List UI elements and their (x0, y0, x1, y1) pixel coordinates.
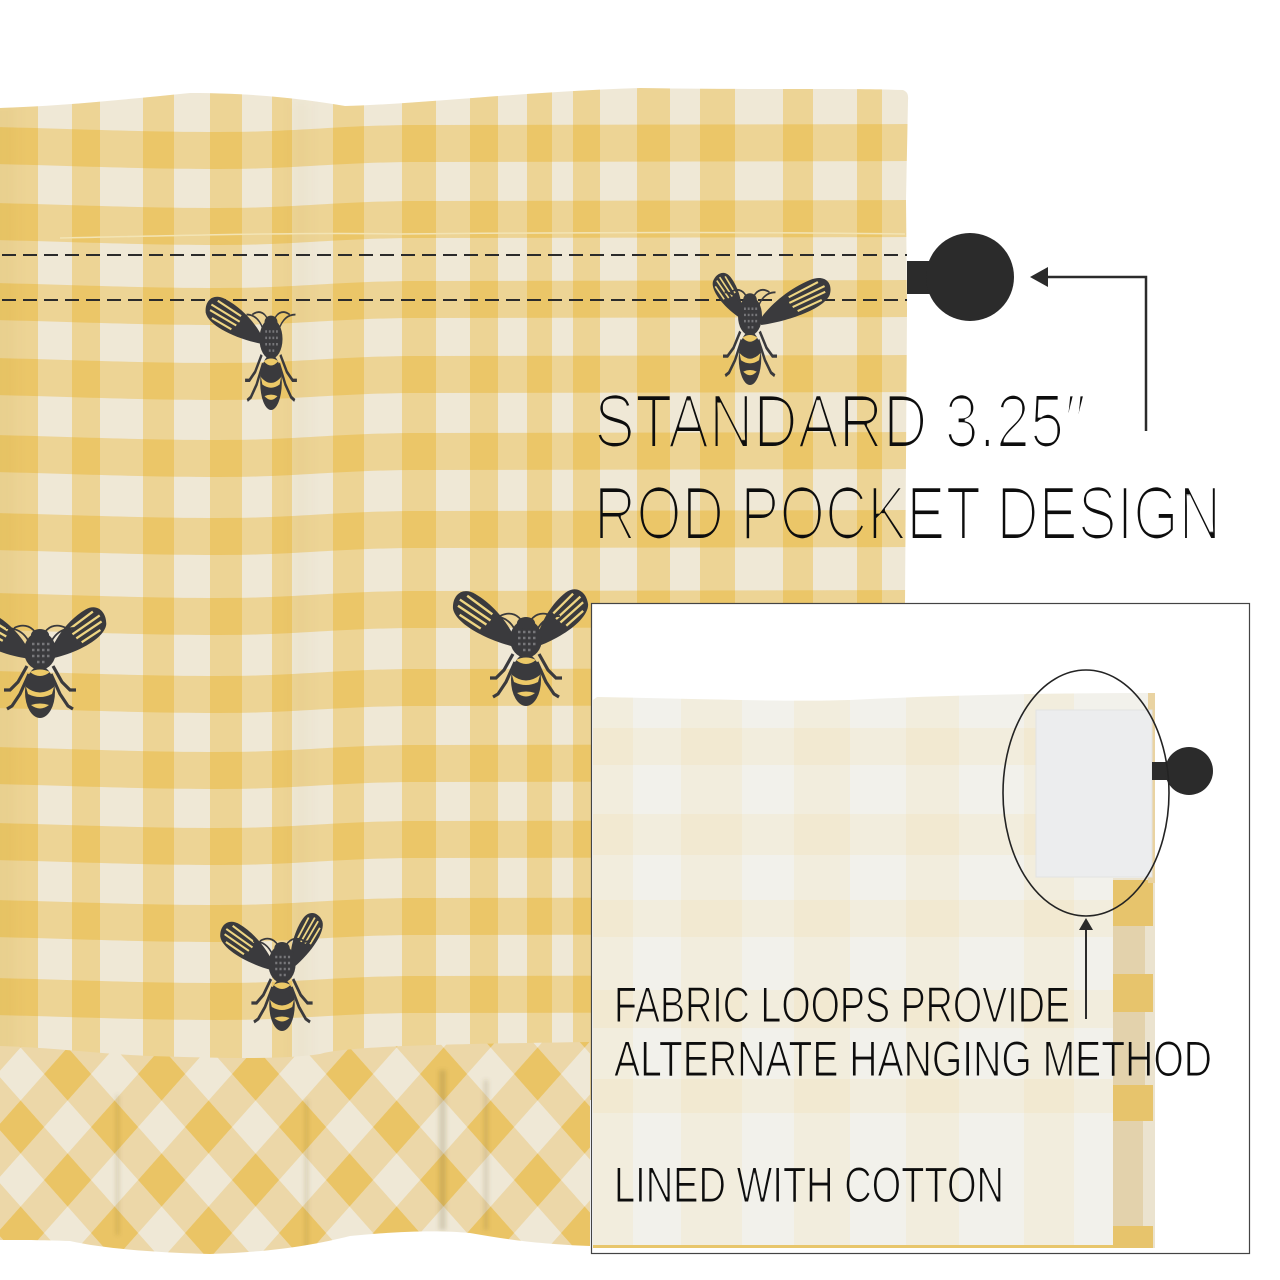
curtain body fabric (0, 80, 930, 1110)
panel: gingham curtain (0, 80, 930, 1260)
gathered ruffle (0, 1040, 600, 1260)
icon: bee near rod pocket (707, 269, 836, 385)
icon: bee top centre-left (199, 293, 297, 410)
icon: inset rod with finial (1152, 747, 1213, 795)
heading: rod pocket design: STANDARD 3.25″ (594, 379, 1086, 463)
inset frame (592, 604, 1250, 1254)
text: lined with cotton: LINED WITH COTTON (614, 1157, 1004, 1213)
panel: inset lining detail (592, 604, 1250, 1254)
fabric loop panel (1036, 710, 1152, 877)
heading: rod pocket design (594, 379, 1221, 555)
arrow: to loop (1079, 918, 1093, 1019)
icon: curtain rod with finial (907, 233, 1014, 321)
rod pocket dashed guide lines (2, 255, 907, 300)
icon: bee bottom (214, 909, 329, 1031)
text: fabric loops: FABRIC LOOPS PROVIDE (614, 977, 1070, 1033)
highlight ellipse (1003, 670, 1169, 916)
icon: bee at left edge (0, 603, 113, 718)
icon: bee centre (446, 584, 596, 706)
inset faded fabric (593, 690, 1163, 1250)
arrow: to rod (1030, 267, 1146, 431)
text: fabric loops (614, 977, 1212, 1087)
inset right unfaded strip (1113, 878, 1155, 1250)
